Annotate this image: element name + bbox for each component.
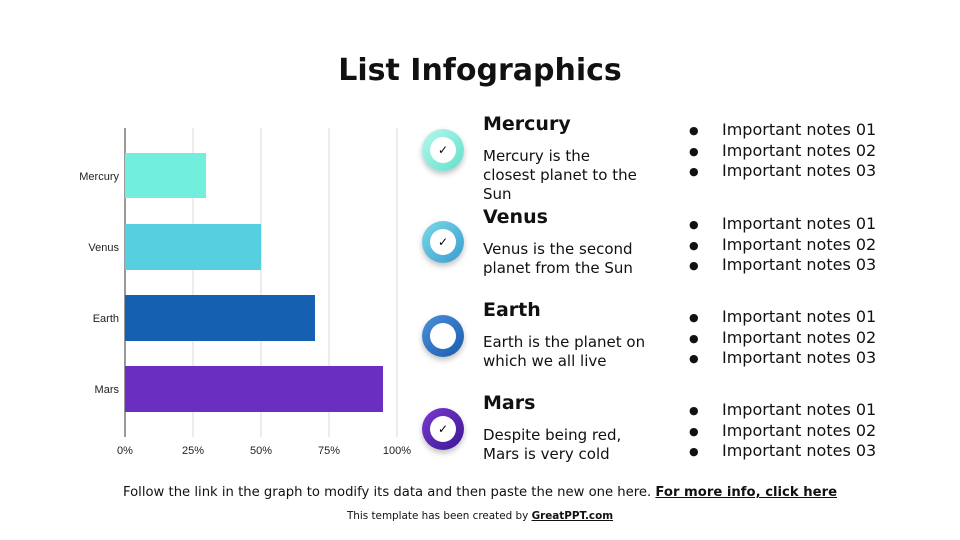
item: mars: Despite being red, Mars is very cold bbox=[483, 426, 621, 463]
credit: This template has been created by GreatPPT.com bbox=[347, 510, 613, 522]
bar chart: Mercury bbox=[79, 171, 119, 183]
item: mercury: Mercury is the bbox=[483, 147, 590, 165]
item: venus: Venus is the second planet from the Sun bbox=[483, 240, 633, 277]
icon: earth bbox=[422, 315, 464, 357]
item: earth bbox=[483, 299, 645, 370]
item: earth: Earth is the planet on which we all live bbox=[483, 333, 645, 370]
notes: earth bbox=[690, 307, 876, 367]
item: mercury bbox=[483, 113, 637, 203]
notes: venus bbox=[690, 214, 876, 274]
notes: venus: Important notes 01 bbox=[722, 214, 876, 233]
item: venus bbox=[483, 206, 633, 277]
item: earth: Earth bbox=[483, 299, 541, 321]
item: mercury: Mercury bbox=[483, 113, 571, 135]
notes: mars: Important notes 02 bbox=[722, 420, 876, 440]
notes: mars: Important notes 01 bbox=[722, 400, 876, 419]
notes: mercury: Important notes 02 bbox=[722, 140, 876, 160]
notes: earth: Important notes 03 bbox=[722, 348, 876, 367]
notes: mercury: Important notes 01 bbox=[722, 120, 876, 139]
icon: mercury: ✓ bbox=[438, 143, 448, 157]
bar chart: 75% bbox=[318, 445, 340, 457]
notes: mercury: Important notes 03 bbox=[722, 161, 876, 180]
bar chart: 50% bbox=[250, 445, 272, 457]
item: mars: Mars bbox=[483, 392, 535, 414]
bar chart bbox=[79, 128, 411, 457]
notes: earth: Important notes 01 bbox=[722, 307, 876, 326]
bar chart: Earth bbox=[93, 313, 119, 325]
bar chart: Mars bbox=[95, 384, 119, 396]
icon: mars: ✓ bbox=[438, 422, 448, 436]
bar chart: 25% bbox=[182, 445, 204, 457]
notes: mercury bbox=[690, 120, 876, 180]
notes: mars bbox=[690, 400, 876, 460]
notes: venus: Important notes 02 bbox=[722, 234, 876, 254]
notes: earth: Important notes 02 bbox=[722, 328, 876, 346]
bar chart: 100% bbox=[383, 445, 411, 457]
item: mars bbox=[483, 392, 621, 463]
bar chart: Venus bbox=[88, 242, 119, 254]
icon: mars bbox=[422, 408, 464, 450]
icon: venus: ✓ bbox=[438, 235, 448, 249]
footer text: Follow the link in the graph to modify its data and then paste the new one here. For more info, click here bbox=[123, 485, 837, 500]
notes: mars: Important notes 03 bbox=[722, 441, 876, 460]
notes: venus: Important notes 03 bbox=[722, 255, 876, 274]
icon: mercury bbox=[422, 129, 464, 171]
icon: venus bbox=[422, 221, 464, 263]
bar chart: 0% bbox=[117, 445, 133, 457]
title: List Infographics bbox=[338, 53, 622, 88]
item: mercury: closest planet to the Sun bbox=[483, 166, 637, 203]
item: venus: Venus bbox=[483, 206, 548, 228]
